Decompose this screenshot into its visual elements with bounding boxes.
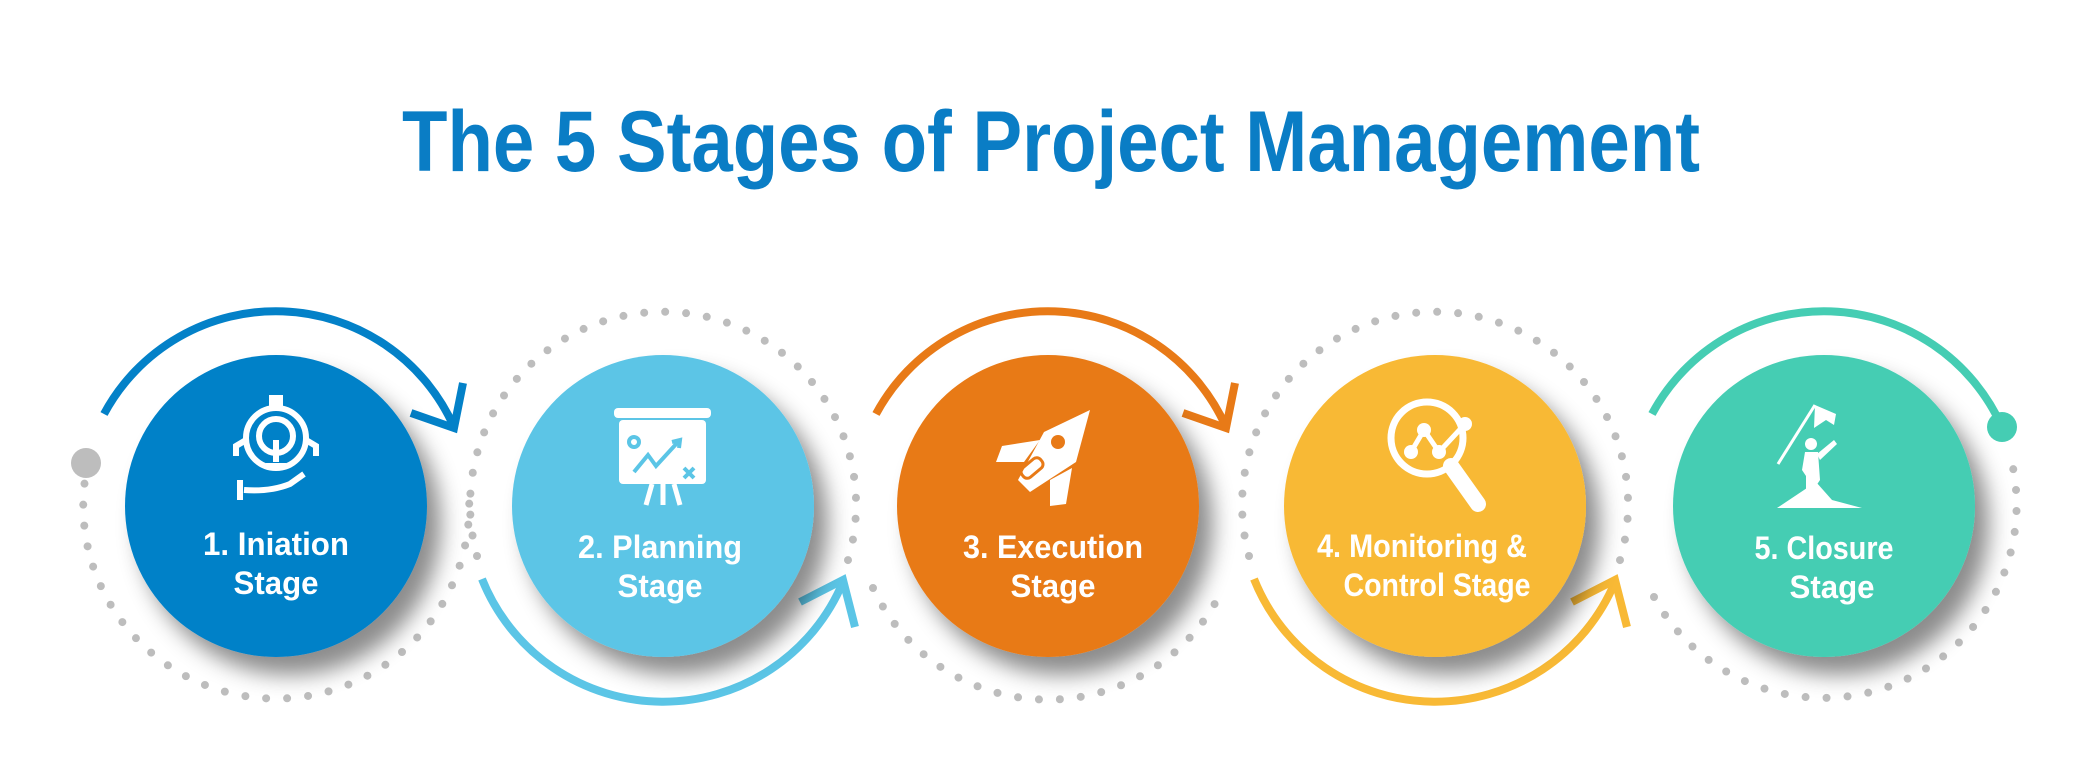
arrow: stage 3	[876, 311, 1235, 428]
label: stage 2: 2. Planning	[578, 529, 742, 565]
label: stage 3: 3. Execution	[963, 529, 1143, 565]
arrow: stage 1	[104, 311, 463, 428]
label: stage 4: 4. Monitoring &	[1317, 528, 1527, 564]
panel: stage 5: Stage	[1790, 569, 1874, 605]
panel: stage 4: Control Stage	[1344, 567, 1530, 603]
icon: climber with flag	[1777, 405, 1862, 508]
label: stage 5: 5. Closure	[1754, 530, 1894, 566]
arrow: stage 5	[1652, 311, 2017, 442]
arrow: stage 2	[482, 579, 855, 702]
label: stage 1: 1. Iniation	[203, 526, 349, 562]
icon: rocket	[996, 410, 1090, 506]
icon: magnifier with network	[1391, 402, 1478, 504]
panel: stage 2: Stage	[618, 568, 702, 604]
panel: stage 3: Stage	[1010, 568, 1096, 604]
icon: presentation board	[614, 408, 711, 505]
panel: stage 4	[1284, 355, 1586, 657]
panel: stage 2	[512, 355, 814, 657]
panel: stage 1	[125, 355, 427, 657]
panel: stage 1: Stage	[234, 565, 318, 601]
arrow: stage 4	[1254, 579, 1627, 702]
title: The 5 Stages of Project Management	[402, 94, 1700, 190]
start dot	[71, 448, 101, 478]
dotted rings	[83, 312, 2017, 700]
panel: stage 3	[897, 355, 1199, 657]
panel: stage 5	[1673, 355, 1975, 657]
icon: lightbulb gear hand	[236, 398, 316, 500]
